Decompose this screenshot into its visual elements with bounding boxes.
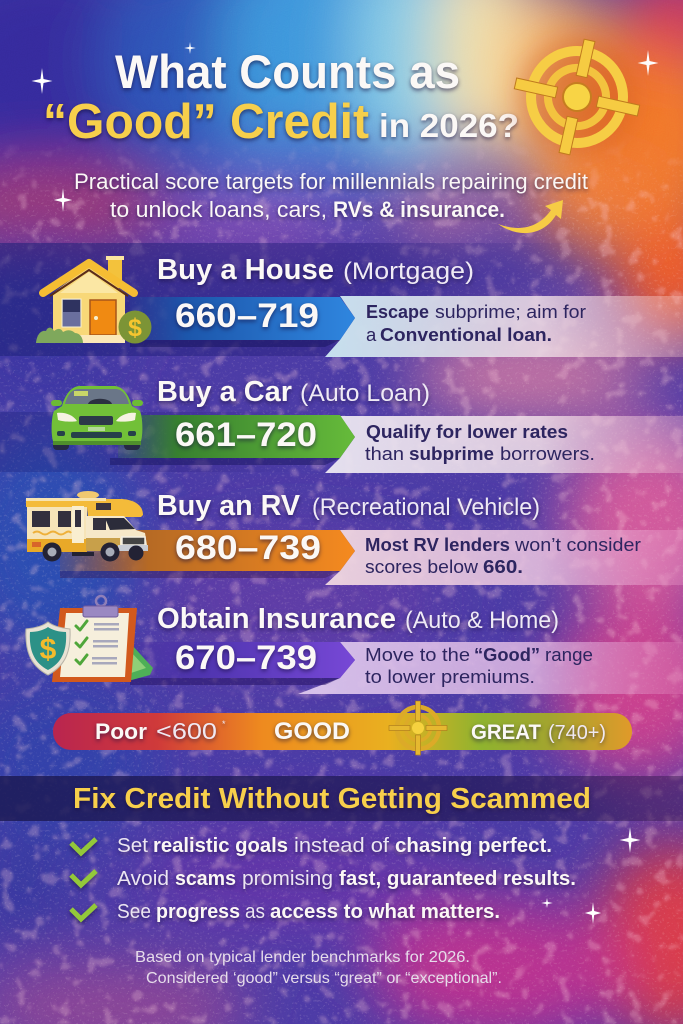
icon: small target [389,701,447,755]
title [43,45,519,149]
description [366,301,586,345]
sparkles [32,42,658,924]
heading [157,376,430,408]
description: Conventional loan. [380,324,552,345]
score ribbon [130,297,355,340]
panel: buy an RV [26,490,683,585]
icon: house [36,256,152,344]
score ribbon [130,639,355,678]
score scale bar: GREAT [471,721,541,744]
score scale bar: (740+) [548,722,606,744]
description: won’t consider [514,534,641,555]
score scale bar [53,701,632,755]
checklist [71,834,576,923]
icon: clipboard with shield [26,596,153,682]
heading: (Auto & Home) [405,607,559,634]
description [365,421,595,464]
subtitle: RVs & insurance. [333,197,505,222]
panel: fix credit heading: Fix Credit Without Getting Scammed [73,783,591,815]
title: What Counts as [115,45,460,98]
item 1 [71,834,552,857]
icon: house: $ [128,314,142,342]
heading [157,603,559,635]
description [365,644,593,687]
icon: RV [26,491,148,562]
score ribbon [60,529,355,571]
panel: buy a house [0,243,683,357]
score ribbon: 670–739 [175,639,317,677]
heading: Buy a House [157,254,334,286]
heading: (Recreational Vehicle) [312,494,540,521]
description: to lower premiums. [365,666,535,687]
icon: clipboard with shield: $ [40,633,57,666]
title: “Good” Credit [43,95,369,149]
panel: fix credit heading [0,776,683,821]
score scale bar: GOOD [274,718,350,745]
description: 660. [483,556,523,577]
item 1: Set [117,834,148,857]
title: in 2026? [379,107,519,144]
description: subprime; aim for [435,301,586,322]
description: borrowers. [500,443,595,464]
panel: buy a car [0,376,683,473]
heading [157,490,540,522]
description: Escape [366,301,429,322]
item 2 [71,867,576,890]
description: Most RV lenders [365,534,510,555]
footnote: Based on typical lender benchmarks for 2026. [135,949,470,966]
heading: Buy an RV [157,490,301,522]
heading: Obtain Insurance [157,603,396,635]
description: range [545,644,593,665]
subtitle: to unlock loans, cars, [110,197,327,222]
item 2: scams [175,867,236,890]
item 2: promising [242,867,333,890]
item 3: progress [156,900,240,923]
description: than [365,443,404,464]
score ribbon: 660–719 [175,297,319,335]
description: Move to the [365,644,470,665]
description: “Good” [474,644,540,665]
description: subprime [409,443,494,464]
item 3: access to what matters. [270,900,500,923]
score scale bar: * [222,719,226,729]
score scale bar: Poor [95,719,147,744]
description: a [366,324,377,345]
heading: (Auto Loan) [300,380,430,407]
footnote: Considered ‘good” versus “great” or “exceptional”. [146,970,502,987]
heading [157,254,474,286]
item 1: chasing perfect. [395,834,552,857]
footnote [135,949,502,987]
item 3: as [245,900,265,923]
subtitle: Practical score targets for millennials repairing credit [74,169,589,194]
item 2: Avoid [117,867,169,890]
subtitle [74,169,589,222]
item 1: instead of [294,834,389,857]
arrow [498,200,563,233]
heading: Buy a Car [157,376,292,408]
score ribbon: 661–720 [175,416,317,454]
description [365,534,641,577]
description: Qualify for lower rates [366,421,568,442]
description: scores below [365,556,479,577]
icon: target crosshair [503,27,651,167]
score ribbon: 680–739 [175,529,321,567]
score ribbon [118,415,355,458]
item 1: realistic goals [153,834,288,857]
item 3 [71,900,500,923]
panel: obtain insurance [26,596,683,694]
score scale bar: <600 [156,718,217,744]
heading: (Mortgage) [343,258,474,285]
icon: car [51,386,143,450]
item 3: See [117,900,151,923]
item 2: fast, guaranteed results. [339,867,576,890]
